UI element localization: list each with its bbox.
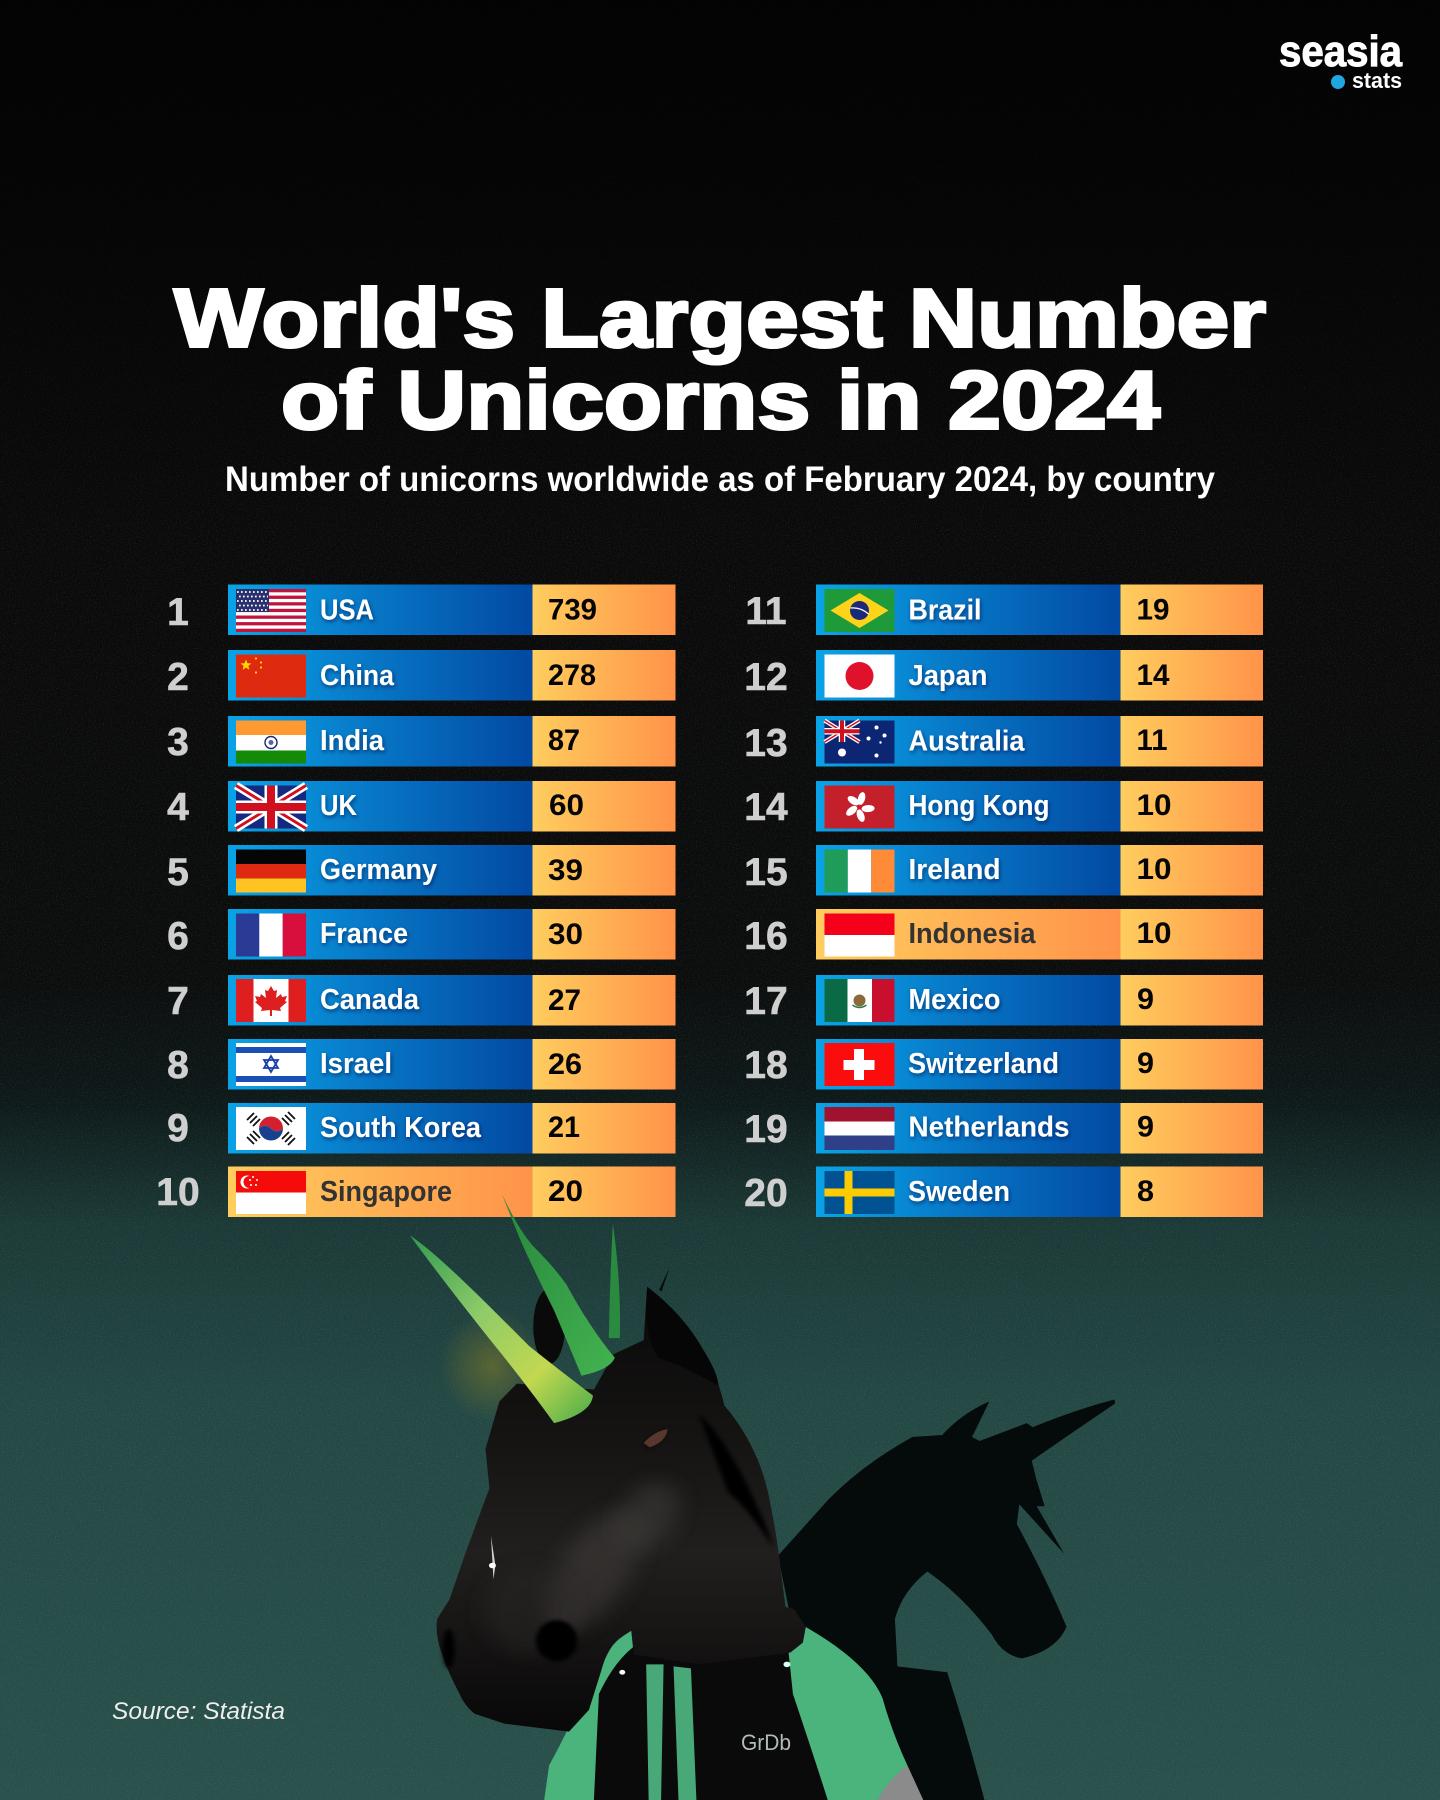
row 13 Australia: 11 [1136, 724, 1168, 757]
row 16 Indonesia: 10 [1136, 917, 1172, 950]
ranking table: left column [156, 584, 676, 1217]
row 6 France [167, 909, 676, 960]
row 8 Israel [167, 1039, 676, 1090]
row 20 Sweden [744, 1166, 1263, 1217]
row 1 USA: 1 [167, 591, 189, 634]
row 20 Sweden: 20 [744, 1172, 788, 1215]
row 5 Germany: Germany [320, 854, 437, 886]
row 18 Switzerland [744, 1039, 1263, 1090]
row 6 France: 30 [548, 918, 583, 951]
row 14 Hong Kong: 14 [744, 786, 788, 829]
row 2 China [167, 650, 676, 700]
row 17 Mexico: Mexico [908, 984, 1000, 1016]
row 4 UK [167, 781, 676, 832]
row 2 China: China [320, 660, 395, 692]
row 18 Switzerland: 9 [1137, 1047, 1154, 1080]
row 4 UK: UK [320, 790, 357, 822]
source note: Source: Statista [112, 1698, 285, 1725]
row 13 Australia: Australia [908, 726, 1025, 758]
title: World's Largest Number [174, 272, 1266, 364]
title: of Unicorns in 2024 [281, 354, 1160, 446]
row 19 Netherlands [744, 1103, 1263, 1154]
row 12 Japan: 12 [744, 656, 788, 699]
row 5 Germany: 39 [548, 854, 583, 887]
row 3 India: 3 [167, 721, 189, 764]
row 4 UK: 4 [167, 786, 189, 829]
row 16 Indonesia [744, 909, 1263, 960]
row 5 Germany: 5 [167, 851, 189, 894]
illustration: unicorn in jacket with shadow [410, 1194, 1115, 1800]
row 11 Brazil: 11 [745, 590, 787, 633]
row 9 South Korea [167, 1103, 676, 1154]
row 3 India: India [320, 725, 385, 757]
subtitle: Number of unicorns worldwide as of February 2024, by country [225, 460, 1215, 499]
row 15 Ireland: 15 [744, 851, 788, 894]
row 19 Netherlands: 9 [1137, 1110, 1154, 1144]
row 6 France: France [320, 918, 408, 950]
row 8 Israel: 8 [167, 1044, 189, 1087]
row 3 India [167, 716, 676, 766]
row 13 Australia [744, 716, 1263, 766]
row 7 Canada: 7 [167, 980, 189, 1023]
row 17 Mexico: 17 [744, 980, 788, 1023]
row 3 India: 87 [548, 724, 580, 757]
row 2 China: 278 [548, 659, 596, 692]
row 7 Canada: 27 [548, 984, 581, 1017]
row 10 Singapore [156, 1166, 676, 1217]
row 8 Israel: Israel [320, 1048, 392, 1080]
logo: seasia stats [1279, 27, 1402, 93]
row 7 Canada: Canada [320, 984, 420, 1016]
row 15 Ireland: Ireland [908, 854, 1000, 886]
row 6 France: 6 [167, 915, 189, 958]
row 9 South Korea: South Korea [320, 1112, 482, 1144]
row 10 Singapore: 20 [548, 1175, 583, 1208]
ranking table: right column [744, 584, 1263, 1217]
row 12 Japan: Japan [908, 660, 988, 692]
row 2 China: 2 [167, 656, 189, 699]
row 9 South Korea: 21 [548, 1111, 580, 1144]
row 14 Hong Kong [744, 781, 1263, 832]
row 10 Singapore: Singapore [320, 1176, 452, 1208]
row 18 Switzerland: 18 [744, 1044, 788, 1087]
row 7 Canada [167, 975, 676, 1026]
row 20 Sweden: Sweden [908, 1176, 1010, 1208]
jacket logo: GrDb [741, 1730, 791, 1755]
row 11 Brazil: Brazil [908, 594, 982, 626]
row 17 Mexico: 9 [1137, 983, 1154, 1016]
row 4 UK: 60 [549, 789, 584, 822]
title [174, 272, 1266, 446]
row 15 Ireland: 10 [1136, 853, 1172, 886]
row 16 Indonesia: 16 [744, 915, 788, 958]
row 14 Hong Kong: Hong Kong [908, 790, 1050, 822]
row 14 Hong Kong: 10 [1136, 789, 1172, 822]
row 19 Netherlands: Netherlands [908, 1112, 1070, 1144]
row 17 Mexico [744, 975, 1263, 1026]
row 10 Singapore: 10 [156, 1171, 200, 1214]
logo: seasia stats: stats [1352, 68, 1402, 93]
row 13 Australia: 13 [744, 722, 788, 765]
row 19 Netherlands: 19 [744, 1108, 788, 1151]
row 5 Germany [167, 845, 676, 896]
row 9 South Korea: 9 [167, 1107, 189, 1150]
row 16 Indonesia: Indonesia [908, 918, 1036, 950]
row 15 Ireland [744, 845, 1263, 896]
row 8 Israel: 26 [548, 1048, 582, 1081]
row 11 Brazil: 19 [1136, 594, 1170, 626]
row 1 USA: USA [320, 594, 374, 626]
row 12 Japan: 14 [1136, 659, 1170, 692]
row 20 Sweden: 8 [1137, 1175, 1154, 1208]
row 11 Brazil [745, 584, 1263, 635]
row 1 USA: 739 [548, 594, 597, 626]
row 1 USA [167, 584, 676, 635]
logo: seasia stats: seasia [1279, 27, 1402, 76]
row 18 Switzerland: Switzerland [908, 1048, 1059, 1080]
row 12 Japan [744, 650, 1263, 700]
